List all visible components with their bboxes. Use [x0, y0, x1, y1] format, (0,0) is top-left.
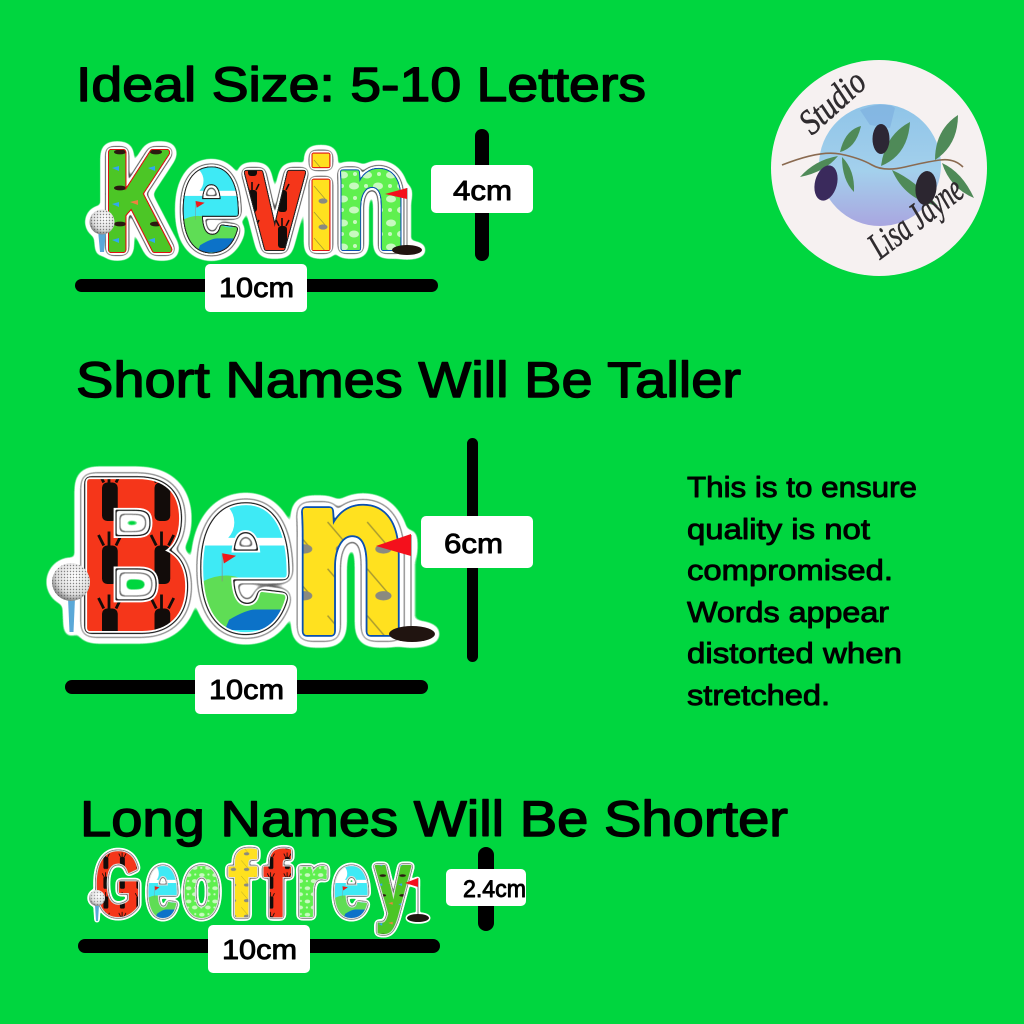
- sticker: Kevin: [90, 116, 422, 281]
- explanatory text: stretched.: [687, 680, 830, 712]
- sticker: Kevin: i: [304, 131, 338, 279]
- ruler: Kevin width: 10cm: [219, 272, 294, 303]
- logo text: Studio: Studio: [791, 61, 874, 142]
- sticker: Kevin: e: [181, 116, 240, 281]
- sticker: Geoffrey: G: [95, 835, 141, 935]
- ruler: Kevin width: [75, 264, 438, 312]
- explanatory text: quality is not: [687, 514, 870, 546]
- ruler: Ben width: [65, 665, 428, 714]
- logo text: Lisa Jayne: Lisa Jayne: [860, 169, 972, 268]
- sticker: Geoffrey: e: [147, 835, 178, 936]
- sticker: Geoffrey: f: [228, 834, 256, 936]
- explanatory text: This is to ensure: [687, 472, 917, 504]
- sticker: Ben: B: [79, 436, 190, 673]
- sticker: Geoffrey: e: [333, 835, 369, 936]
- explanatory text: [687, 472, 917, 712]
- sticker: Kevin: v: [246, 118, 304, 280]
- sticker: Geoffrey: r: [295, 835, 327, 936]
- heading: short names: Short Names Will Be Taller: [76, 352, 741, 408]
- heading: ideal size: Ideal Size: 5-10 Letters: [76, 59, 646, 112]
- sticker: Ben: n: [293, 425, 407, 681]
- sticker: Kevin: n: [334, 118, 406, 280]
- ruler: Ben height: 6cm: [444, 528, 503, 559]
- ruler: Ben width: 10cm: [209, 674, 284, 705]
- logo olives: [811, 124, 938, 206]
- ruler: Geoffrey height: 2.4cm: [463, 876, 526, 903]
- sticker: Ben: [52, 425, 435, 681]
- sticker: Geoffrey: f: [263, 834, 290, 936]
- ruler: Geoffrey width: [78, 925, 440, 973]
- sticker: Geoffrey: y: [375, 833, 411, 934]
- logo watercolor circle: [819, 104, 941, 226]
- sticker: Geoffrey: [89, 833, 429, 936]
- heading: long names: Long Names Will Be Shorter: [80, 791, 788, 847]
- ruler: Ben height: [421, 438, 533, 662]
- ruler: Geoffrey height: [446, 847, 526, 931]
- explanatory text: Words appear: [687, 597, 889, 629]
- sticker: Kevin: K: [104, 122, 170, 280]
- explanatory text: distorted when: [687, 638, 902, 670]
- logo branch and leaves: [782, 115, 974, 206]
- sticker: Geoffrey: o: [183, 835, 220, 936]
- sticker: Ben: e: [199, 427, 290, 674]
- explanatory text: compromised.: [687, 555, 893, 587]
- ruler: Kevin height: 4cm: [453, 175, 512, 206]
- ruler: Geoffrey width: 10cm: [222, 934, 297, 965]
- ruler: Kevin height: [431, 129, 533, 261]
- logo: Studio Lisa Jayne: [771, 60, 987, 276]
